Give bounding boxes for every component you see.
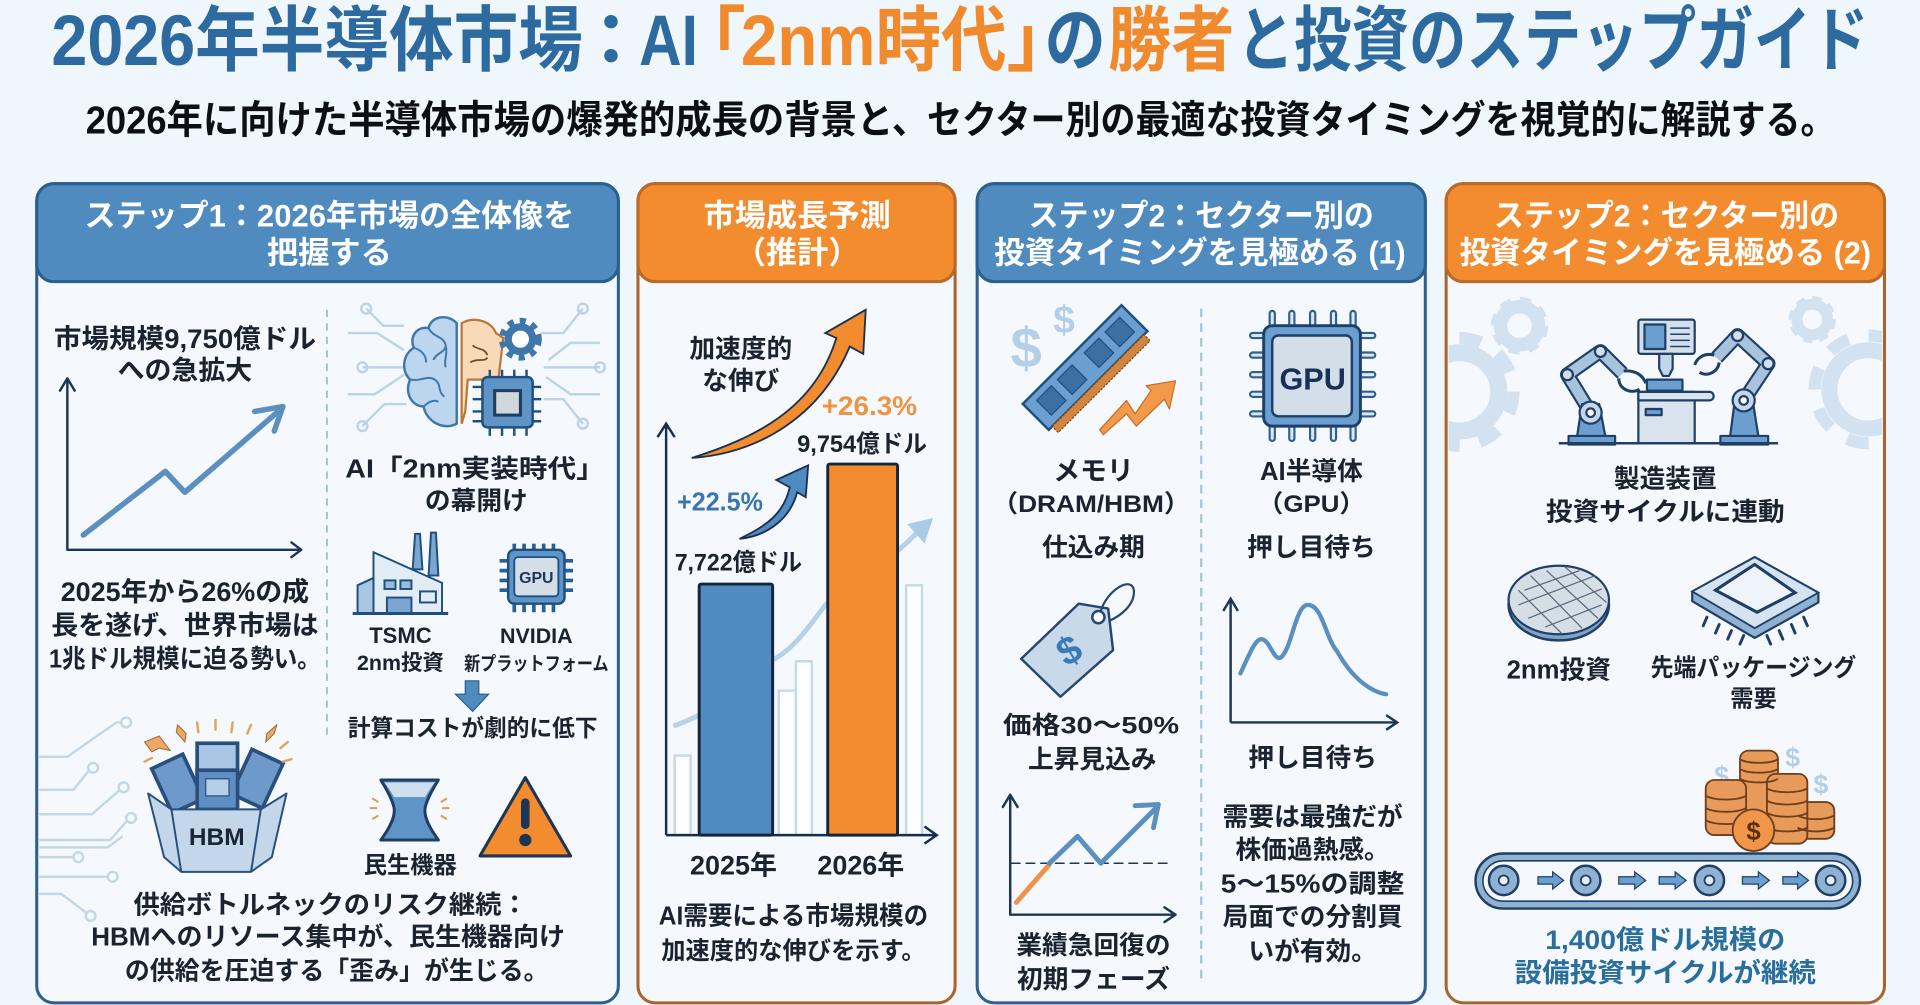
heading: market size: 市場規模9,750億ドル: [54, 324, 316, 354]
caption: forecast: 加速度的な伸びを示す。: [661, 937, 926, 965]
text: supply bottleneck risk: HBMへのリソース集中が、民生機器向け: [91, 921, 565, 951]
icon: circuit traces: [39, 718, 136, 921]
icon: conveyor belt: [1476, 853, 1860, 909]
text: supply bottleneck risk: [91, 890, 565, 986]
labels: AI semiconductor: 押し目待ち: [1247, 533, 1376, 562]
title: ：: [576, 2, 647, 81]
title: 勝者: [1108, 2, 1234, 81]
title: [51, 2, 1869, 81]
heading: market size: への急拡大: [118, 356, 252, 386]
label: wait for pullback: 押し目待ち: [1248, 744, 1377, 773]
icon: large GPU chip: [1253, 313, 1373, 438]
bar: 2026: [828, 464, 898, 835]
chart: axes: [658, 424, 937, 844]
text: price rise: [1003, 711, 1179, 774]
header: step 1: 把握する: [267, 235, 392, 270]
labels: wafer and packaging: [1507, 653, 1856, 712]
icon: warning triangle: [480, 778, 571, 856]
label: acceleration: な伸び: [702, 366, 780, 395]
labels: wafer and packaging: 先端パッケージング: [1651, 653, 1856, 682]
panel: step 2 part 2: [1444, 182, 1886, 1004]
icon: NVIDIA GPU chip: GPU: [519, 570, 554, 587]
background: light trend bars and curve: [673, 518, 933, 835]
subtitle: 2026年に向けた半導体市場の爆発的成長の背景と、: [86, 99, 928, 142]
icon: HBM memory chips in box: HBM: [189, 824, 245, 851]
header: forecast: （推計）: [735, 235, 860, 270]
chart: market growth line: [60, 378, 301, 557]
title: 2nm時代: [741, 2, 1007, 81]
text: supply bottleneck risk: 供給ボトルネックのリスク継続：: [133, 890, 528, 919]
label: consumer devices: 民生機器: [364, 852, 457, 878]
labels: wafer and packaging: 需要: [1730, 686, 1777, 712]
icon: HBM memory chips in box: [144, 720, 291, 872]
text: capex cycle: 設備投資サイクルが継続: [1515, 957, 1816, 988]
heading: market size: [54, 324, 316, 386]
icon: memory module: $: [1053, 299, 1075, 342]
header: step 2 part 1: [977, 184, 1425, 282]
text: equipment: [1546, 464, 1785, 526]
text: buy on dips: 需要は最強だが: [1223, 801, 1403, 831]
text: 26 percent growth: 2025年から26%の成: [61, 577, 309, 607]
labels: memory: （DRAM/HBM）: [992, 490, 1190, 518]
icon: squeezed consumer device: [370, 780, 449, 840]
header: step 2 part 2: 投資タイミングを見極める (2): [1460, 235, 1871, 270]
caption: early recovery: 初期フェーズ: [1017, 964, 1170, 994]
text: capex cycle: 1,400億ドル規模の: [1545, 925, 1785, 955]
text: buy on dips: 株価過熱感。: [1236, 835, 1390, 864]
decoration: gears: [1448, 296, 1882, 452]
axis labels: 2026年: [817, 850, 904, 880]
text: price rise: 上昇見込み: [1028, 745, 1157, 774]
labels: TSMC and NVIDIA: 新プラットフォーム: [464, 653, 609, 675]
caption: early recovery: [1016, 931, 1171, 994]
arrow: acceleration: [692, 310, 866, 458]
text: 2nm era: [345, 455, 605, 515]
icon: memory module: [1010, 299, 1176, 436]
icon: NVIDIA GPU chip: [500, 544, 573, 612]
panel: step 1 overview: [37, 184, 618, 1003]
labels: memory: メモリ: [1053, 456, 1134, 486]
header: step 1: [37, 184, 618, 282]
label: acceleration: [689, 335, 792, 395]
title: 2026年半導体市場: [51, 2, 583, 81]
icon: price tag: [1021, 584, 1134, 697]
label: +22.5%: +22.5%: [677, 489, 763, 517]
text: 2nm era: AI「2nm実装時代」: [345, 455, 605, 484]
header: forecast: 市場成長予測: [703, 199, 891, 234]
labels: TSMC and NVIDIA: NVIDIA: [500, 624, 573, 648]
panel: step 2 part 1: [977, 184, 1425, 1003]
header: forecast: [638, 184, 955, 282]
arrow: down: [456, 681, 489, 711]
label: acceleration: 加速度的: [689, 335, 792, 364]
bar: 2025: [699, 584, 773, 835]
caption: forecast: [659, 901, 928, 965]
header: step 2 part 2: ステップ2：セクター別の: [1494, 199, 1839, 234]
icon: advanced package: [1692, 557, 1818, 644]
icon: robot arms and machine: [1559, 320, 1778, 444]
caption: early recovery: 業績急回復の: [1016, 931, 1171, 960]
text: buy on dips: いが有効。: [1248, 936, 1377, 966]
labels: wafer and packaging: 2nm投資: [1507, 655, 1611, 684]
header: step 2 part 1: ステップ2：セクター別の: [1029, 199, 1374, 234]
value: 2025: 7,722億ドル: [675, 549, 802, 577]
text: 26 percent growth: 1兆ドル規模に迫る勢い。: [49, 644, 321, 673]
header: step 1: ステップ1：2026年市場の全体像を: [84, 199, 574, 234]
text: buy on dips: 局面での分割買: [1223, 903, 1403, 932]
text: buy on dips: 5〜15%の調整: [1221, 870, 1404, 899]
icon: coin stacks: $: [1813, 769, 1828, 799]
chart: pullback curve: [1223, 599, 1397, 730]
icon: coin stacks: $: [1714, 761, 1729, 791]
title: 」: [1007, 2, 1078, 81]
panel: market growth forecast: [638, 184, 955, 1003]
arrow: 22.5 percent: [740, 465, 808, 539]
labels: AI semiconductor: AI半導体: [1260, 457, 1363, 486]
text: compute cost: 計算コストが劇的に低下: [348, 715, 598, 741]
icon: large GPU chip: GPU: [1279, 362, 1346, 396]
icon: memory module: $: [1010, 316, 1042, 379]
text: capex cycle: [1515, 925, 1816, 988]
labels: TSMC and NVIDIA: 2nm投資: [357, 651, 444, 675]
icon: coin stacks: $: [1785, 743, 1800, 773]
value: 2026: 9,754億ドル: [797, 430, 927, 458]
header: step 2 part 1: 投資タイミングを見極める (1): [994, 235, 1406, 270]
text: price rise: 価格30〜50%: [1003, 711, 1179, 739]
subtitle: セクター別の最適な投資タイミングを視覚的に解説する。: [927, 99, 1836, 142]
text: 26 percent growth: [49, 577, 321, 673]
axis labels: [690, 850, 904, 880]
text: buy on dips: [1221, 801, 1404, 966]
title: AI: [639, 2, 698, 81]
text: 2nm era: の幕開け: [425, 486, 528, 515]
icon: AI brain and chip: [348, 304, 605, 436]
header: step 2 part 2: [1446, 184, 1884, 282]
labels: memory: [992, 456, 1190, 562]
icon: coin stacks: [1706, 743, 1834, 851]
axis labels: 2025年: [690, 850, 777, 880]
title: 「: [675, 2, 746, 81]
text: equipment: 投資サイクルに連動: [1546, 497, 1785, 526]
title: の: [1044, 2, 1106, 81]
caption: forecast: AI需要による市場規模の: [659, 901, 928, 930]
labels: memory: 仕込み期: [1042, 533, 1145, 562]
subtitle: [86, 99, 1836, 142]
label: +26.3%: +26.3%: [822, 391, 917, 421]
labels: TSMC and NVIDIA: TSMC: [369, 623, 432, 648]
text: 26 percent growth: 長を遂げ、世界市場は: [51, 610, 319, 640]
icon: factory: [353, 533, 448, 613]
chart: recovery phase: [1003, 795, 1176, 922]
labels: TSMC and NVIDIA: [357, 623, 609, 675]
icon: price tag: $: [1049, 627, 1090, 675]
labels: AI semiconductor: （GPU）: [1258, 490, 1365, 518]
labels: AI semiconductor: [1247, 457, 1376, 562]
icon: coin stacks: $: [1746, 818, 1761, 846]
text: supply bottleneck risk: の供給を圧迫する「歪み」が生じる。: [125, 956, 549, 986]
text: equipment: 製造装置: [1614, 464, 1717, 493]
icon: wafer: [1509, 566, 1609, 640]
